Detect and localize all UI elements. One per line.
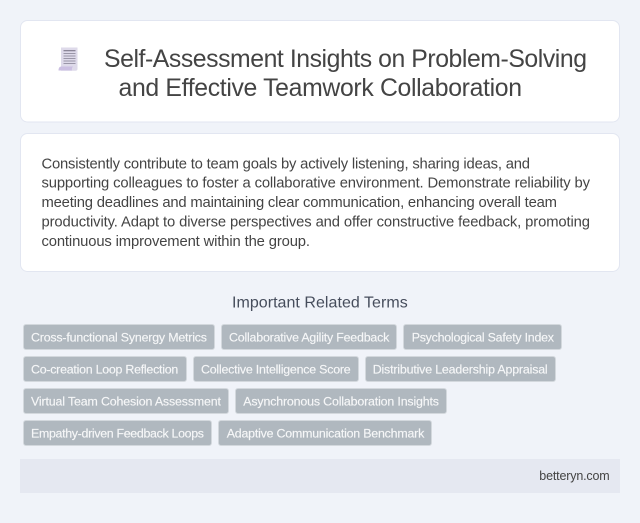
chip [404,324,562,350]
panel: related term chips [24,324,562,446]
chip [236,388,446,414]
icon: document scroll [58,48,78,71]
chip: Co-creation Loop Reflection [31,362,178,376]
chip [222,324,396,350]
chip [366,356,556,382]
chip: Psychological Safety Index [412,330,555,344]
title: and Effective Teamwork Collaboration [118,75,522,102]
chip: Distributive Leadership Appraisal [373,362,548,376]
panel: summary text [20,134,620,272]
chip [24,420,212,446]
panel: summary text: meeting deadlines and maintaining clear communication, enhancing overall team [42,195,557,211]
panel: summary text: supporting colleagues to foster a collaborative environment. Demonstrate reliability by [42,176,591,192]
panel: header [20,20,620,122]
chip: Asynchronous Collaboration Insights [243,394,439,408]
chip [194,356,358,382]
footer: betteryn.com [539,469,610,483]
panel: summary text: productivity. Adapt to diverse perspectives and offer constructive feedback, promoting [42,215,590,231]
heading: related terms: Important Related Terms [232,294,408,311]
title [104,46,587,102]
chip [218,420,432,446]
title: Self-Assessment Insights on Problem-Solving [104,46,587,73]
chip: Collective Intelligence Score [201,362,351,376]
panel: summary text: Consistently contribute to team goals by actively listening, sharing ideas, and [42,156,530,172]
chip: Adaptive Communication Benchmark [227,426,425,440]
chip [24,388,228,414]
panel: summary text: continuous improvement within the group. [42,234,310,250]
chip: Empathy-driven Feedback Loops [31,426,204,440]
chip: Virtual Team Cohesion Assessment [31,394,222,408]
chip [24,324,214,350]
chip [24,356,186,382]
footer [20,459,620,493]
chip: Cross-functional Synergy Metrics [31,330,207,344]
chip: Collaborative Agility Feedback [229,330,390,344]
